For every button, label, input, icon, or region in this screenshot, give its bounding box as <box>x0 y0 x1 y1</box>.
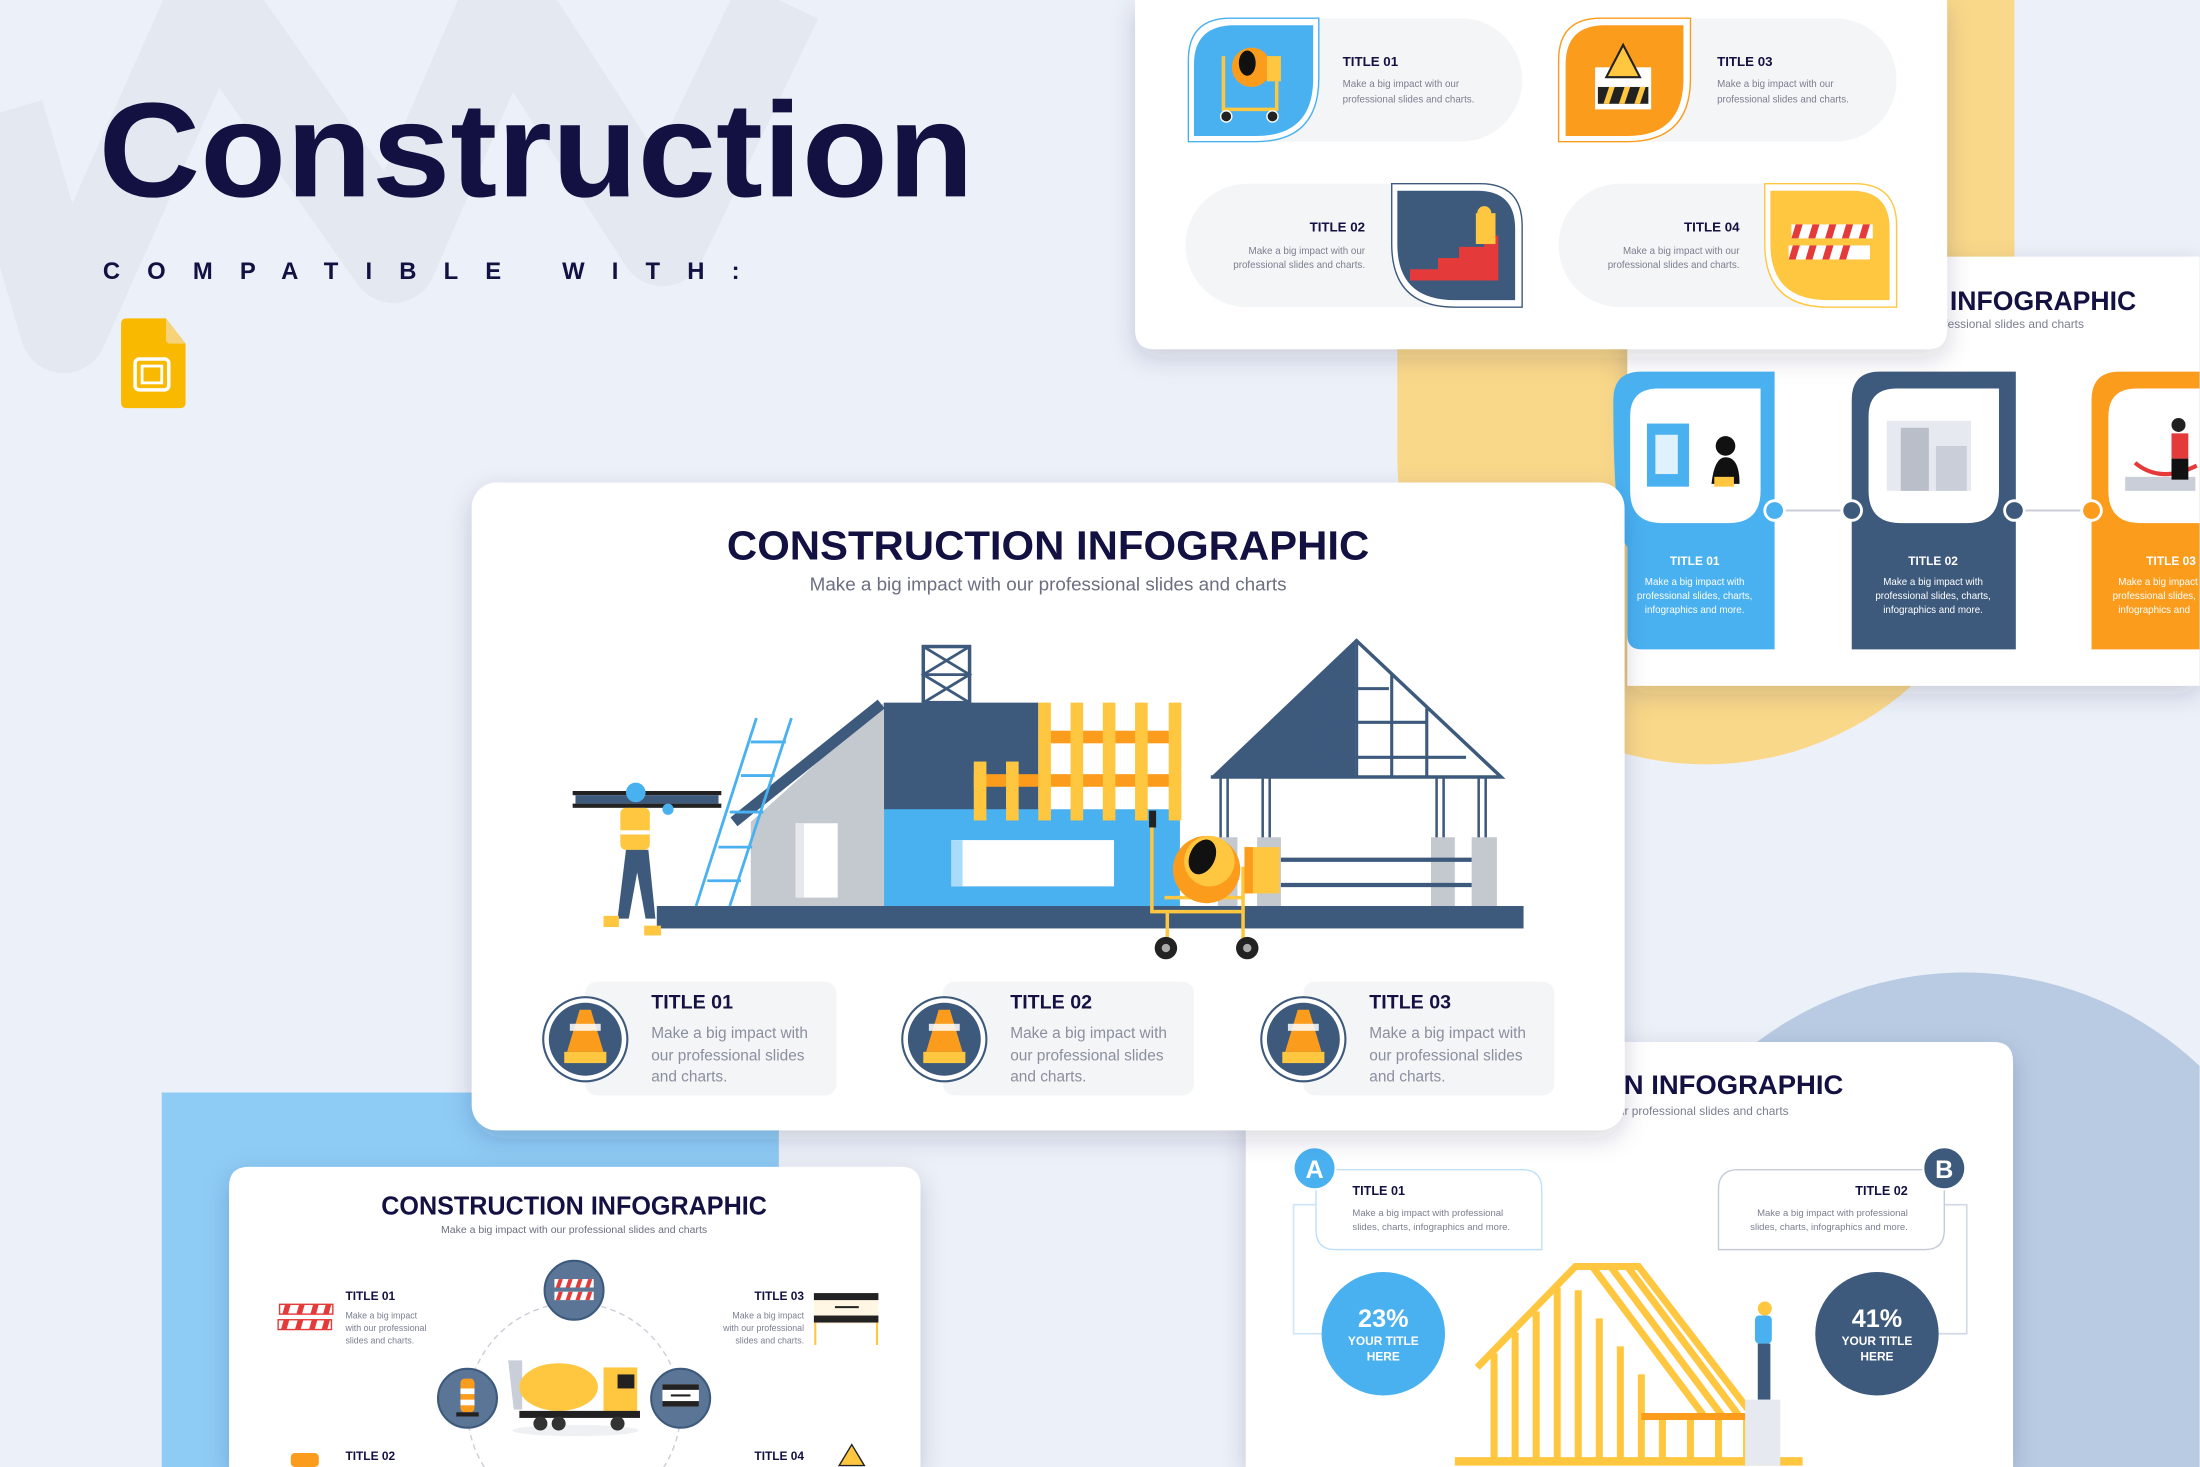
item: title 02 <box>1186 184 1522 307</box>
timeline subtitle: fessional slides and charts <box>1944 317 2084 331</box>
timeline card 02: professional slides, charts, <box>1875 591 1991 602</box>
dashed cycle <box>467 1303 681 1467</box>
timeline card 03: TITLE 03 <box>2146 554 2196 568</box>
icon: barrier circle <box>545 1261 604 1320</box>
item: title 03: TITLE 03 <box>754 1289 804 1303</box>
bottom-right heading: CONSTRUCTION INFOGRAPHIC <box>1423 1070 1843 1100</box>
house <box>734 647 1181 906</box>
panel: top slide with four items <box>1135 0 1947 349</box>
house frame illustration <box>1455 1266 1803 1461</box>
item: title 04: TITLE 04 <box>754 1449 804 1463</box>
item: title 01: TITLE 01 <box>651 991 733 1013</box>
compatible with label: COMPATIBLE WITH: <box>103 258 740 285</box>
timeline card 01: Make a big impact with <box>1645 577 1744 588</box>
timeline card 02: infographics and more. <box>1883 605 1983 616</box>
item: title 02 <box>291 1449 395 1467</box>
item: title 01 <box>543 982 836 1095</box>
item: title 02: TITLE 02 <box>1310 219 1365 234</box>
worker carrying beam <box>573 783 721 935</box>
item: title 02: and charts. <box>1010 1068 1086 1085</box>
item: title 03: our professional slides <box>1369 1047 1523 1064</box>
main title: Construction <box>99 74 974 225</box>
item: title 03: professional slides and charts. <box>1717 94 1849 105</box>
item: title 01: and charts. <box>651 1068 727 1085</box>
item: title 04: professional slides and charts. <box>1608 260 1740 271</box>
decorative blue circle <box>1621 973 2200 1467</box>
box B: Make a big impact with professional <box>1757 1208 1908 1219</box>
truck illustration <box>508 1360 640 1436</box>
box B: slides, charts, infographics and more. <box>1750 1222 1908 1233</box>
stat circle 23%: HERE <box>1367 1349 1400 1363</box>
decorative light blue block <box>162 1093 779 1467</box>
icon: sign circle <box>651 1369 710 1428</box>
box B <box>1718 1147 1965 1250</box>
item: title 02: Make a big impact with <box>1010 1025 1167 1042</box>
timeline heading: INFOGRAPHIC <box>1950 286 2136 316</box>
panel: bottom-right slide <box>1246 1042 2013 1467</box>
box A: TITLE 01 <box>1352 1184 1405 1198</box>
item: title 02: professional slides and charts. <box>1233 260 1365 271</box>
icon: google slides <box>121 318 186 408</box>
item: title 01: TITLE 01 <box>345 1289 395 1303</box>
timeline card 01: professional slides, charts, <box>1637 591 1752 602</box>
item: title 03: Make a big impact <box>732 1310 805 1320</box>
item: title 01: Make a big impact <box>345 1310 418 1320</box>
construction scene illustration <box>573 640 1524 959</box>
box A: slides, charts, infographics and more. <box>1352 1222 1510 1233</box>
item: title 01 <box>278 1289 426 1346</box>
box A: Make a big impact with professional <box>1352 1208 1503 1219</box>
item: title 03: slides and charts. <box>735 1336 804 1346</box>
main slide subtitle: Make a big impact with our professional slides and charts <box>810 573 1287 594</box>
item: title 04 <box>754 1445 864 1466</box>
item: title 01: with our professional <box>344 1323 426 1333</box>
item: title 03: and charts. <box>1369 1068 1446 1085</box>
bracket lines <box>1294 1205 1322 1334</box>
connector line <box>1775 510 2097 512</box>
timeline card 03: professional slides, <box>2113 591 2196 602</box>
item: title 01: professional slides and charts. <box>1343 94 1474 105</box>
item: title 01: Make a big impact with our <box>1343 79 1460 90</box>
item: title 02: our professional slides <box>1010 1047 1164 1064</box>
cement mixer <box>1149 811 1280 959</box>
item: title 03 <box>1261 982 1554 1095</box>
item: title 03 <box>722 1289 878 1346</box>
stat circle 41%: HERE <box>1860 1349 1894 1363</box>
timeline card 01 <box>1613 372 1784 649</box>
bottom-left heading: CONSTRUCTION INFOGRAPHIC <box>381 1193 767 1221</box>
panel: bottom-left slide <box>229 1167 920 1467</box>
timeline card 03 <box>2082 372 2200 649</box>
item: title 03: TITLE 03 <box>1717 54 1773 69</box>
ladder <box>696 718 791 906</box>
bottom-right subtitle: Make a big impact with our professional slides and charts <box>1487 1104 1789 1118</box>
item: title 02: Make a big impact with our <box>1249 246 1366 257</box>
item: title 03: TITLE 03 <box>1369 991 1451 1013</box>
timeline card 02: Make a big impact with <box>1883 577 1983 588</box>
stat circle 23% <box>1322 1272 1445 1395</box>
item: title 03 <box>1559 18 1897 142</box>
box A <box>1294 1147 1542 1250</box>
stat circle 23%: YOUR TITLE <box>1348 1334 1419 1348</box>
item: title 04: Make a big impact with our <box>1623 246 1740 257</box>
stat circle 41%: 41% <box>1852 1305 1902 1333</box>
item: title 01: our professional slides <box>651 1047 805 1064</box>
panel: timeline slide <box>1613 257 2200 686</box>
stat circle 41%: YOUR TITLE <box>1842 1334 1912 1348</box>
item: title 01: TITLE 01 <box>1343 54 1399 69</box>
box A: A <box>1305 1156 1324 1184</box>
main slide heading: CONSTRUCTION INFOGRAPHIC <box>727 523 1369 569</box>
worker on frame <box>1745 1302 1780 1466</box>
timeline card 03: infographics and <box>2118 605 2190 616</box>
stat circle 41% <box>1815 1272 1939 1395</box>
box B: B <box>1935 1156 1953 1184</box>
item: title 02 <box>902 982 1194 1095</box>
item: title 01: Make a big impact with <box>651 1025 808 1042</box>
ground <box>657 906 1524 928</box>
timeline card 01: infographics and more. <box>1645 605 1744 616</box>
item: title 02: TITLE 02 <box>345 1449 395 1463</box>
bottom-left subtitle: Make a big impact with our professional slides and charts <box>441 1224 707 1236</box>
box B: TITLE 02 <box>1855 1184 1908 1198</box>
stat circle 23%: 23% <box>1358 1305 1409 1333</box>
item: title 01 <box>1188 18 1522 142</box>
icon: drum circle <box>438 1369 497 1428</box>
pavilion <box>1211 640 1501 906</box>
item: title 01: slides and charts. <box>345 1336 414 1346</box>
decorative yellow shape <box>1397 0 2014 764</box>
item: title 03: with our professional <box>722 1323 804 1333</box>
item: title 04 <box>1559 184 1897 307</box>
panel: main slide <box>472 482 1625 1130</box>
timeline card 02 <box>1842 372 2024 649</box>
timeline card 03: Make a big impact <box>2118 577 2198 588</box>
item: title 03: Make a big impact with our <box>1717 79 1834 90</box>
item: title 04: TITLE 04 <box>1684 219 1740 234</box>
item: title 02: TITLE 02 <box>1010 991 1092 1013</box>
timeline card 01: TITLE 01 <box>1670 554 1720 568</box>
timeline card 02: TITLE 02 <box>1908 554 1958 568</box>
item: title 03: Make a big impact with <box>1369 1025 1526 1042</box>
